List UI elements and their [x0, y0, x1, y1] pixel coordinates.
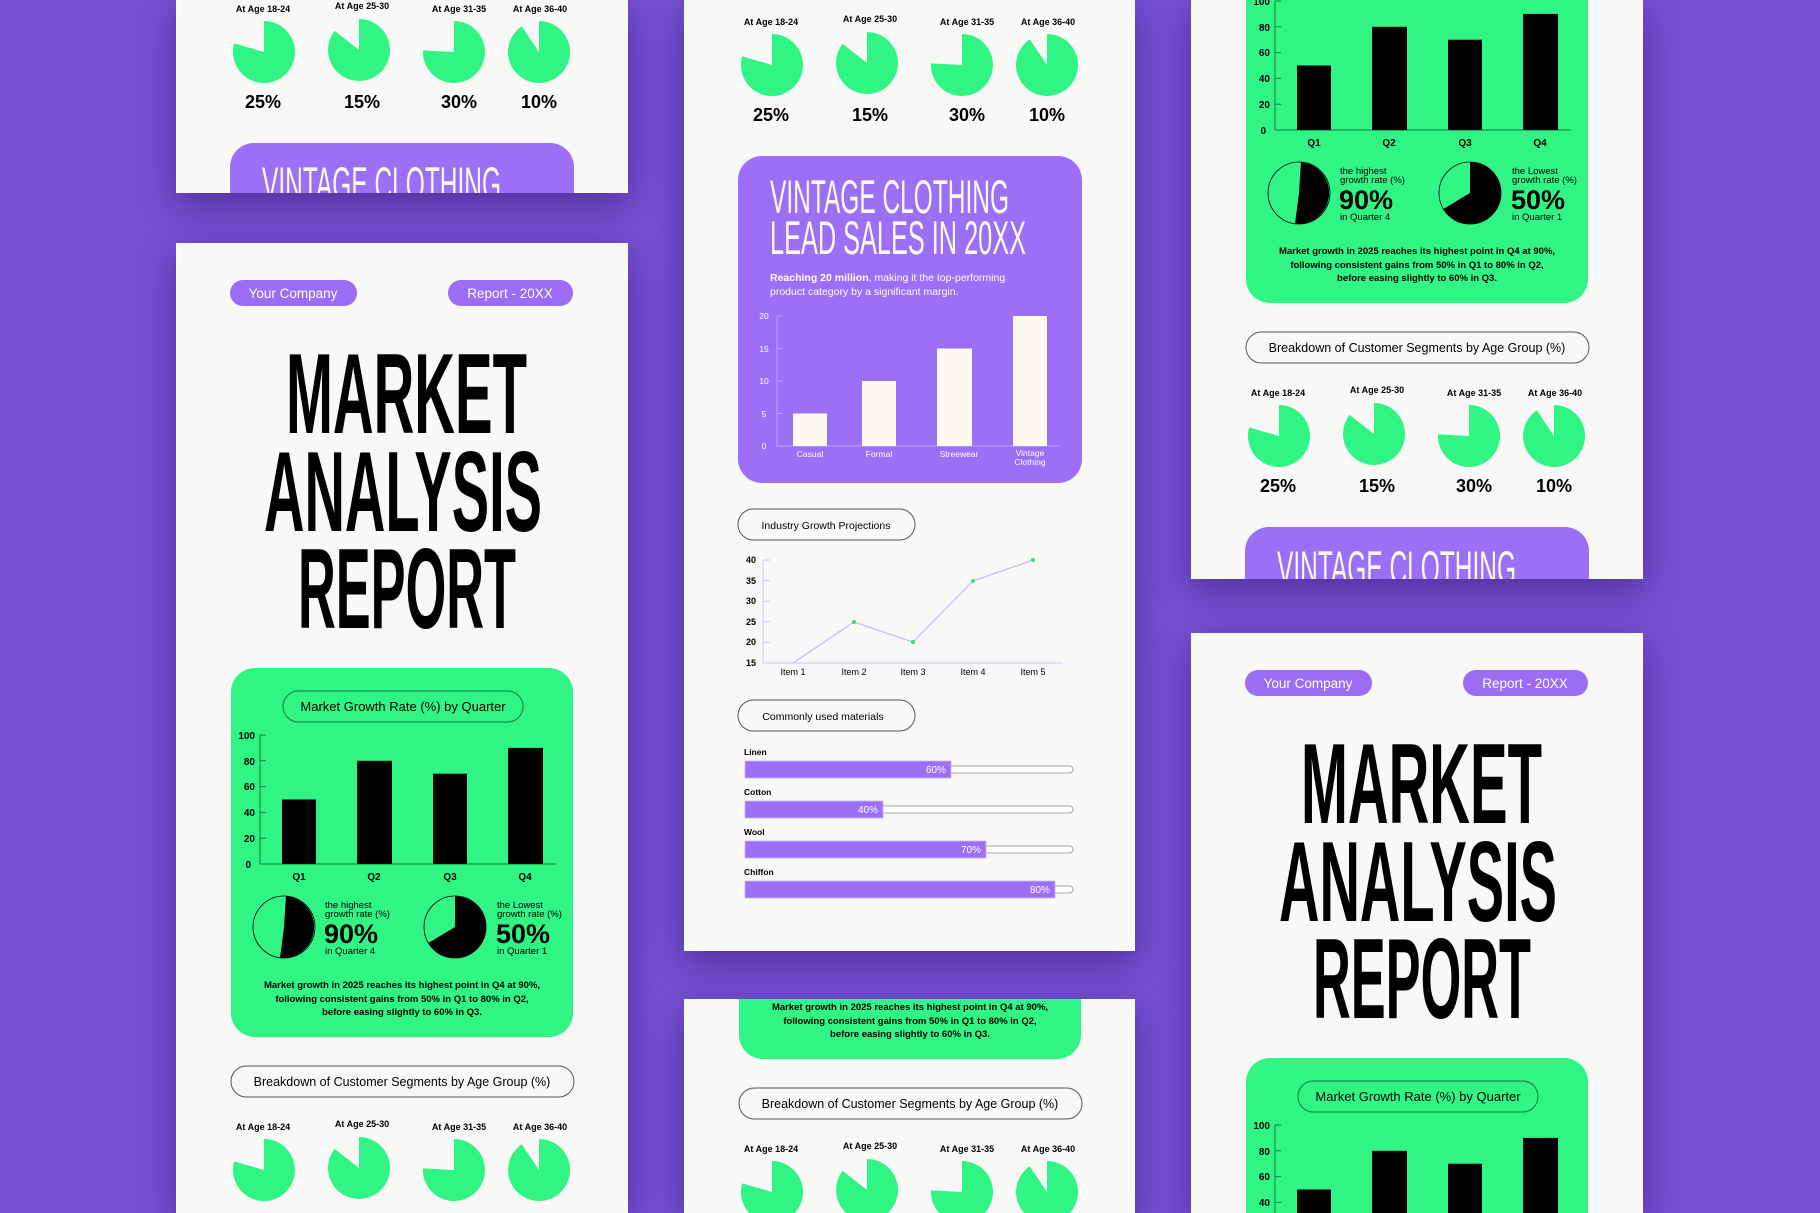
age group pies: At Age 25-30	[843, 14, 897, 24]
line chart: 25	[746, 617, 756, 627]
bar chart: sales by category: 15	[759, 344, 769, 354]
age group pies: 15%	[344, 92, 380, 112]
breakdown pill + age pies: At Age 36-40	[1528, 388, 1582, 398]
pie: highest: the highest	[325, 900, 372, 911]
age group pies	[741, 14, 1078, 125]
pie: lowest: 50%	[1511, 185, 1565, 215]
breakdown pill + age pies: Breakdown of Customer Segments by Age Group (%)	[254, 1075, 550, 1089]
bar chart: quarters: 20	[244, 834, 255, 845]
breakdown pill + age pies: At Age 31-35	[940, 1144, 994, 1154]
title	[264, 331, 542, 653]
pie: highest: the highest	[1340, 166, 1387, 177]
bar chart: sales by category: 0	[762, 441, 767, 451]
breakdown pill + age pies: At Age 25-30	[335, 1119, 389, 1129]
green summary text: before easing slightly to 60% in Q3.	[322, 1007, 482, 1018]
age group pies: At Age 25-30	[335, 1, 389, 11]
bar chart: quarters: Q2	[367, 872, 381, 883]
bar chart: quarters: 0	[1260, 126, 1266, 137]
breakdown pill + age pies: At Age 18-24	[236, 1122, 290, 1132]
age group pies: 10%	[521, 92, 557, 112]
pie: highest: in Quarter 4	[1340, 212, 1390, 223]
industry growth projections	[738, 509, 1063, 677]
age group pies: At Age 18-24	[236, 4, 290, 14]
line chart: 30	[746, 596, 756, 606]
pie: lowest: growth rate (%)	[497, 909, 562, 920]
line chart: Item 1	[780, 667, 806, 677]
vintage clothing panel	[738, 156, 1082, 483]
pie: highest: growth rate (%)	[325, 909, 390, 920]
bar chart: sales by category: Clothing	[1014, 457, 1046, 467]
breakdown pill + age pies	[739, 1088, 1082, 1213]
panel: col3 top (green chart, breakdown, vintage header)	[1191, 0, 1643, 579]
pie: highest: growth rate (%)	[1340, 175, 1405, 186]
bar chart: quarters: 60	[1259, 48, 1270, 59]
commonly used materials	[738, 700, 1073, 898]
breakdown pill + age pies: At Age 31-35	[432, 1122, 486, 1132]
green summary text: Market growth in 2025 reaches its highest point in Q4 at 90%,	[264, 980, 540, 991]
age group pies: 25%	[753, 105, 789, 125]
age group pies: 15%	[852, 105, 888, 125]
line chart: Item 5	[1020, 667, 1046, 677]
commonly used materials: 60%	[926, 765, 946, 776]
panel: col2 bottom (green summary end + breakdown)	[684, 999, 1135, 1213]
green panel bottom: before easing slightly to 60% in Q3.	[830, 1029, 990, 1040]
line chart: 35	[746, 576, 756, 586]
panel: col3 cover page	[1191, 633, 1643, 1213]
green panel bottom: Market growth in 2025 reaches its highest point in Q4 at 90%,	[772, 1002, 1048, 1013]
breakdown pill + age pies: Breakdown of Customer Segments by Age Group (%)	[1269, 341, 1565, 355]
commonly used materials: Linen	[744, 747, 767, 757]
breakdown pill + age pies: At Age 36-40	[1021, 1144, 1075, 1154]
bar chart: quarters: Q3	[443, 872, 457, 883]
commonly used materials: 70%	[961, 845, 981, 856]
vintage box top	[230, 143, 574, 470]
pie: highest: 90%	[1339, 185, 1393, 215]
commonly used materials: 40%	[858, 805, 878, 816]
bar chart: quarters: Q4	[518, 872, 532, 883]
pie: lowest	[1439, 162, 1577, 224]
header pills: Report - 20XX	[467, 286, 553, 301]
bar chart: quarters: 80	[244, 757, 255, 768]
header pills	[230, 280, 573, 306]
title	[1279, 721, 1557, 1043]
line chart: Item 4	[960, 667, 986, 677]
bar chart: quarters: 80	[1259, 23, 1270, 34]
pie: lowest: in Quarter 1	[497, 946, 547, 957]
bar chart: sales by category: 5	[762, 409, 767, 419]
bar chart: quarters: 80	[1259, 1147, 1270, 1158]
header pills	[1245, 670, 1588, 696]
breakdown pill + age pies: At Age 31-35	[1447, 388, 1501, 398]
bar chart: sales by category: Formal	[866, 449, 892, 459]
industry growth projections: Industry Growth Projections	[762, 520, 890, 532]
panel: col1 top (cropped age pies + vintage header)	[176, 0, 628, 193]
header pills: Your Company	[249, 286, 338, 301]
green panel: market growth: Market Growth Rate (%) by Quarter	[300, 699, 506, 714]
bar chart: quarters	[1253, 1121, 1571, 1213]
breakdown pill + age pies: At Age 36-40	[513, 1122, 567, 1132]
age group pies: At Age 18-24	[744, 17, 798, 27]
vintage clothing panel: Reaching 20 million, making it the top-performing	[770, 272, 1005, 284]
bar chart: sales by category	[759, 311, 1060, 467]
bar chart: quarters: 40	[1259, 1198, 1270, 1209]
green summary text: Market growth in 2025 reaches its highest point in Q4 at 90%,	[1279, 246, 1555, 257]
breakdown pill + age pies: At Age 18-24	[744, 1144, 798, 1154]
age group pies: At Age 31-35	[940, 17, 994, 27]
bar chart: quarters: 60	[1259, 1172, 1270, 1183]
pie: lowest: the Lowest	[1512, 166, 1558, 177]
breakdown pill + age pies: Breakdown of Customer Segments by Age Group (%)	[762, 1097, 1058, 1111]
commonly used materials: 80%	[1030, 885, 1050, 896]
green summary text: following consistent gains from 50% in Q1 to 80% in Q2,	[275, 994, 529, 1005]
breakdown pill + age pies: At Age 25-30	[1350, 385, 1404, 395]
breakdown pill + age pies: 15%	[1359, 476, 1395, 496]
line chart: 15	[746, 658, 756, 668]
breakdown pill + age pies: 25%	[1260, 476, 1296, 496]
pie: highest: in Quarter 4	[325, 946, 375, 957]
line chart: Item 3	[900, 667, 926, 677]
bar chart: quarters: 40	[244, 808, 255, 819]
pie: highest: 90%	[324, 919, 378, 949]
pie: lowest: 50%	[496, 919, 550, 949]
breakdown pill + age pies: At Age 18-24	[1251, 388, 1305, 398]
age group pies: 25%	[245, 92, 281, 112]
commonly used materials: Cotton	[744, 787, 771, 797]
green panel bottom	[739, 690, 1081, 1059]
pie: highest	[1268, 162, 1405, 224]
green panel top	[1246, 1058, 1588, 1213]
vintage clothing panel: product category by a significant margin.	[770, 286, 959, 298]
pie: lowest: in Quarter 1	[1512, 212, 1562, 223]
pie: highest	[253, 896, 390, 958]
bar chart: quarters: Q1	[1307, 138, 1321, 149]
bar chart: quarters: Q3	[1458, 138, 1472, 149]
line chart: Item 2	[841, 667, 867, 677]
vintage box top	[1245, 527, 1589, 854]
bar chart: quarters	[238, 731, 556, 883]
bar chart: quarters: 20	[1259, 100, 1270, 111]
bar chart: quarters: Q2	[1382, 138, 1396, 149]
breakdown pill + age pies	[1246, 332, 1589, 496]
green summary text	[1279, 246, 1555, 284]
green summary text	[264, 980, 540, 1018]
bar chart: quarters: 100	[1253, 1121, 1270, 1132]
green panel top: Market Growth Rate (%) by Quarter	[1315, 1089, 1521, 1104]
breakdown pill + age pies: 30%	[1456, 476, 1492, 496]
bar chart: sales by category: Casual	[797, 449, 823, 459]
bar chart: quarters: Q4	[1533, 138, 1547, 149]
header pills: Report - 20XX	[1482, 676, 1568, 691]
bar chart: sales by category: Vintage	[1016, 448, 1045, 458]
bar chart: sales by category: Streewear	[940, 449, 979, 459]
age group pies: 30%	[949, 105, 985, 125]
age group pies: At Age 36-40	[513, 4, 567, 14]
age group pies: At Age 31-35	[432, 4, 486, 14]
age group pies: At Age 36-40	[1021, 17, 1075, 27]
line chart: 20	[746, 637, 756, 647]
commonly used materials: Commonly used materials	[762, 711, 884, 723]
green panel: market growth	[231, 668, 573, 1037]
green summary text: following consistent gains from 50% in Q1 to 80% in Q2,	[1290, 260, 1544, 271]
bar chart: sales by category: 10	[759, 376, 769, 386]
bar chart: sales by category: 20	[759, 311, 769, 321]
bar chart: quarters	[1253, 0, 1571, 149]
green panel bottom: following consistent gains from 50% in Q1 to 80% in Q2,	[783, 1016, 1037, 1027]
header pills: Your Company	[1264, 676, 1353, 691]
breakdown pill + age pies	[231, 1066, 574, 1213]
bar chart: quarters: 0	[245, 860, 251, 871]
pie: lowest	[424, 896, 562, 958]
age group pies: 30%	[441, 92, 477, 112]
pie: lowest: the Lowest	[497, 900, 543, 911]
pie: lowest: growth rate (%)	[1512, 175, 1577, 186]
bar chart: quarters: 100	[238, 731, 255, 742]
green summary text: before easing slightly to 60% in Q3.	[1337, 273, 1497, 284]
bar chart: quarters: 40	[1259, 74, 1270, 85]
line chart	[746, 555, 1063, 677]
panel: col1 cover page	[176, 243, 628, 1213]
bar chart: quarters: 60	[244, 782, 255, 793]
green panel: market growth	[1246, 0, 1588, 303]
bar chart: quarters: Q1	[292, 872, 306, 883]
breakdown pill + age pies: At Age 25-30	[843, 1141, 897, 1151]
commonly used materials: Wool	[744, 827, 765, 837]
age group pies	[233, 1, 570, 112]
commonly used materials: Chiffon	[744, 867, 774, 877]
line chart: 40	[746, 555, 756, 565]
breakdown pill + age pies: 10%	[1536, 476, 1572, 496]
panel: col2 top (pies, vintage, line chart, materials)	[684, 0, 1135, 951]
age group pies: 10%	[1029, 105, 1065, 125]
